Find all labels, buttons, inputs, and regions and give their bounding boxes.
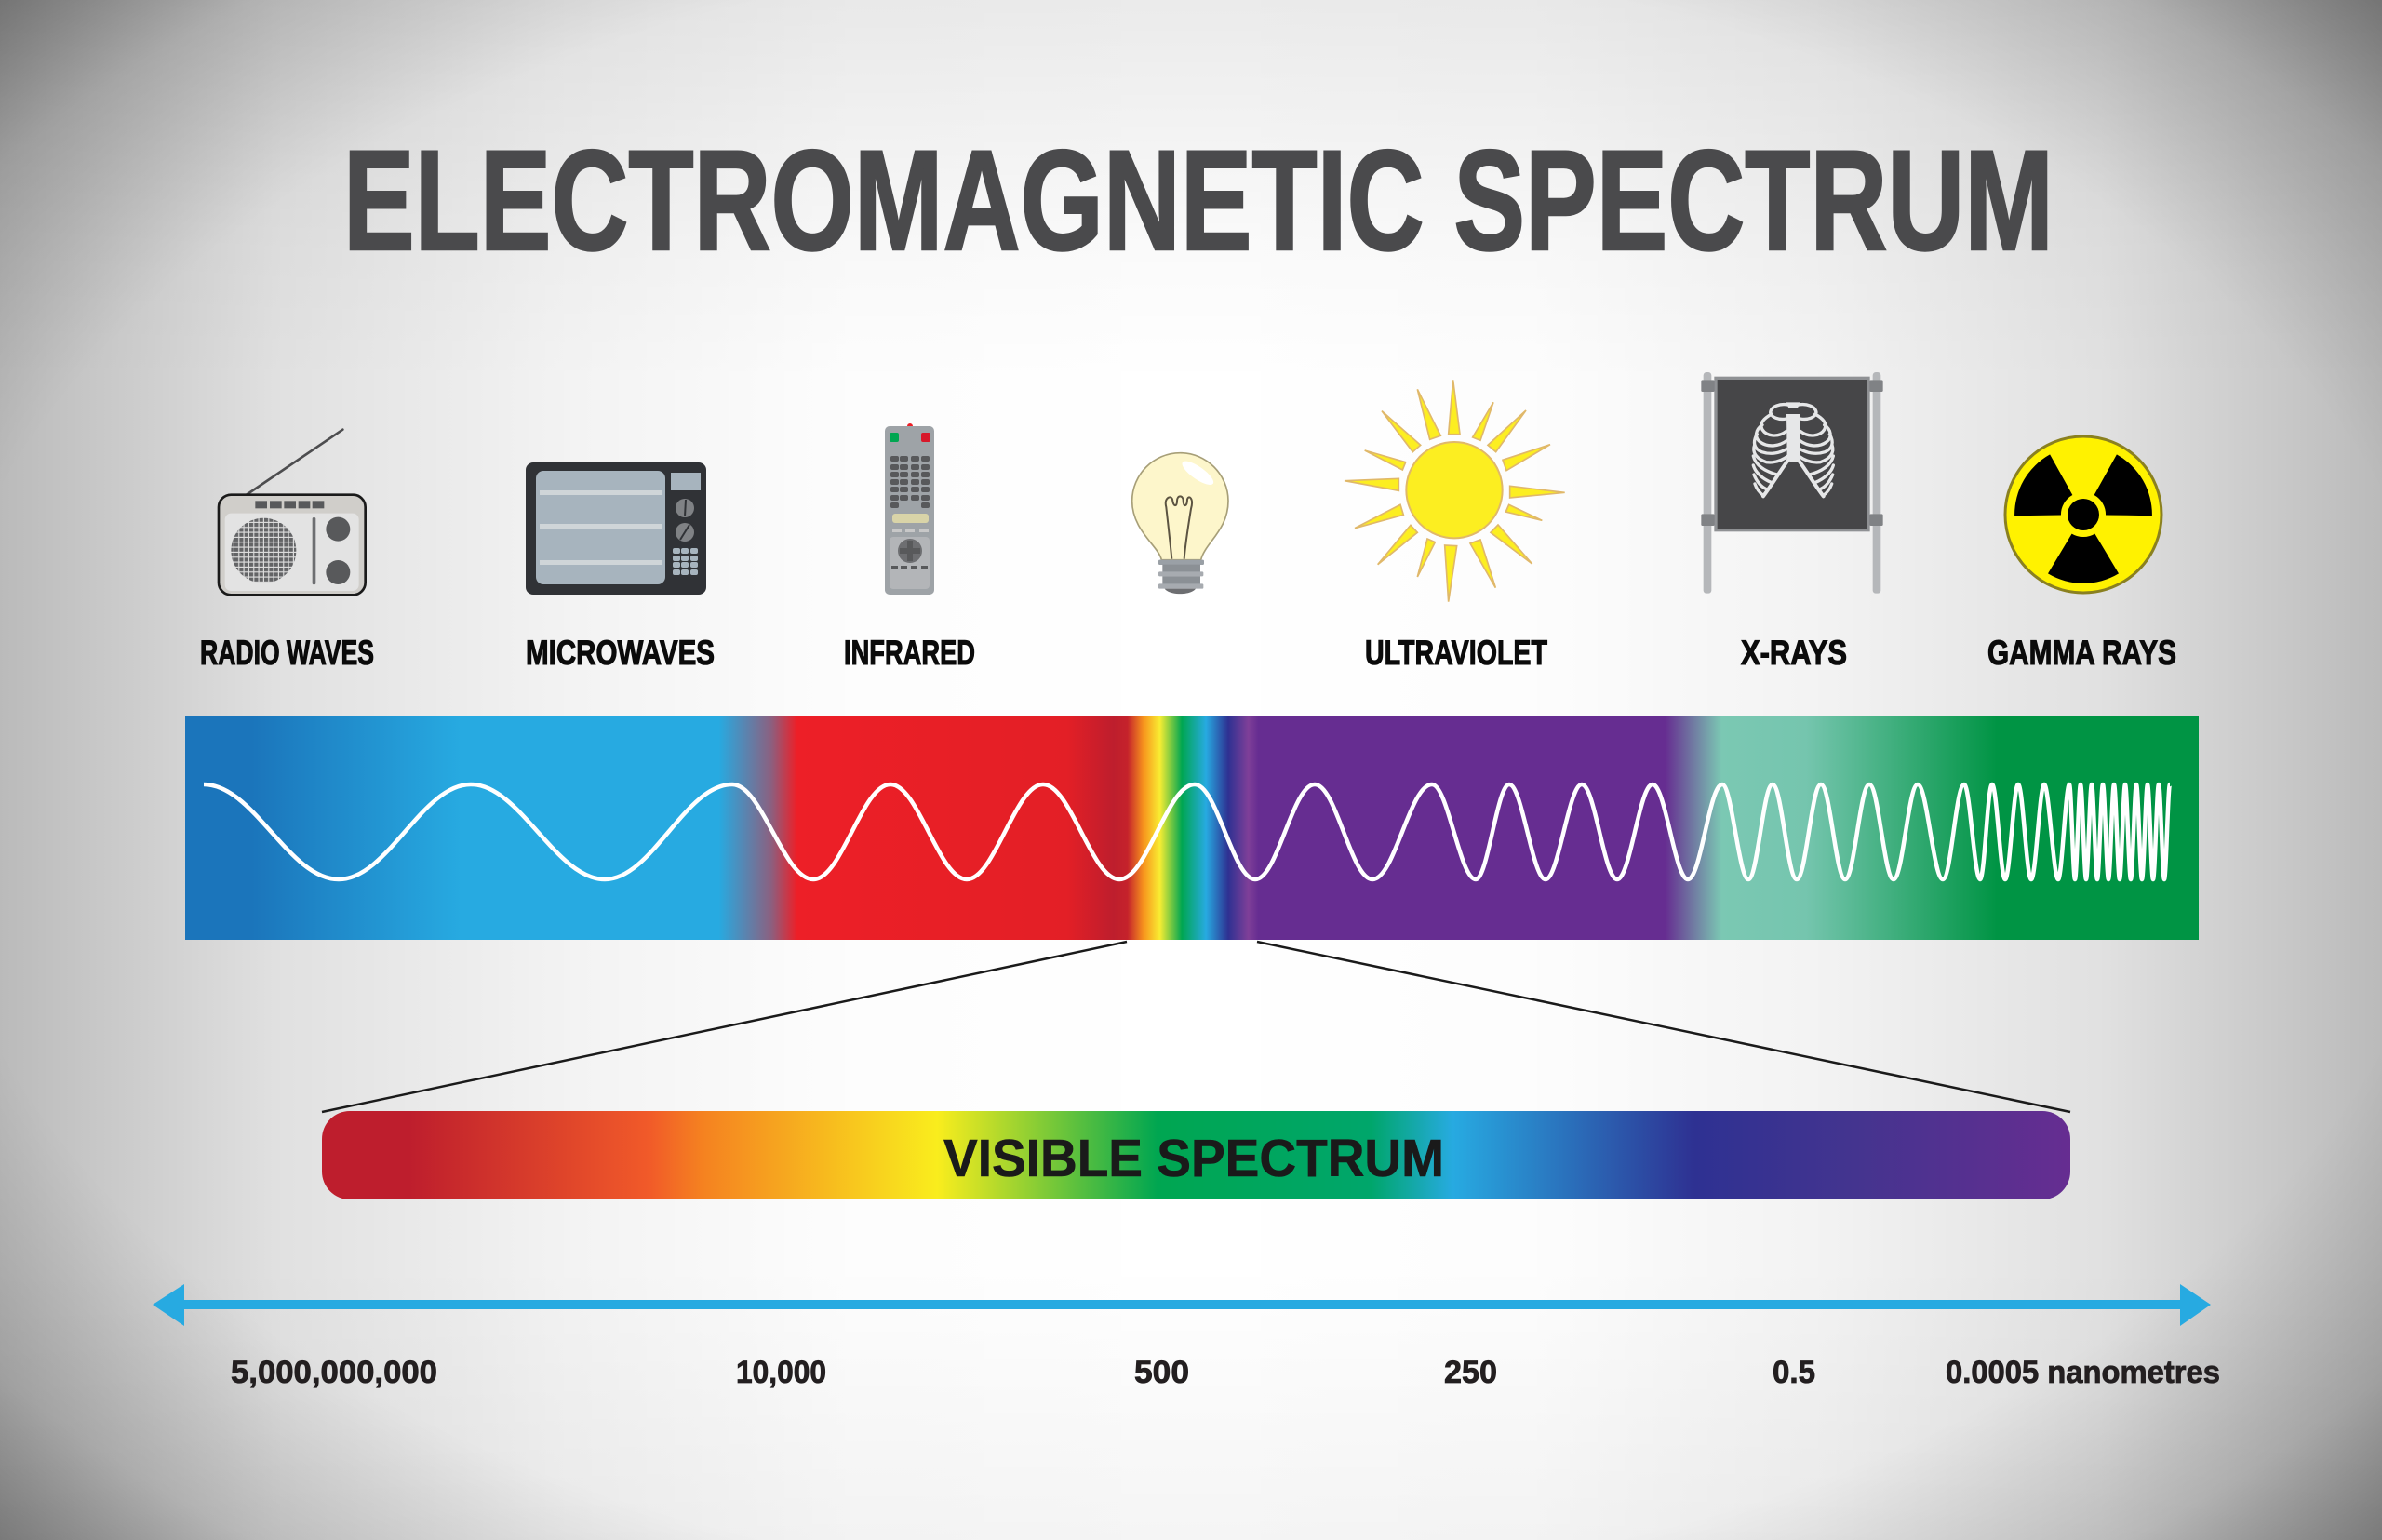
label: microwaves: MICROWAVES — [526, 634, 715, 672]
label: radio waves: RADIO WAVES — [200, 634, 374, 672]
value: 5,000,000,000: 5,000,000,000 — [231, 1355, 437, 1390]
label: x-rays: X-RAYS — [1741, 634, 1847, 672]
icon: radiation symbol — [2005, 436, 2161, 593]
value: 0.5: 0.5 — [1773, 1355, 1815, 1390]
icon: remote control — [885, 423, 934, 595]
rib cage — [1753, 402, 1833, 496]
visible spectrum bar — [322, 1111, 2070, 1199]
value: 250: 250 — [1444, 1355, 1497, 1390]
icon: light bulb — [1132, 453, 1228, 594]
value: 500: 500 — [1134, 1355, 1189, 1390]
wave — [204, 784, 2170, 879]
label: ultraviolet: ULTRAVIOLET — [1365, 634, 1547, 672]
icon: microwave — [526, 462, 706, 595]
icon: sun — [1345, 380, 1565, 602]
spectrum bar — [185, 716, 2199, 940]
visible spectrum label: VISIBLE SPECTRUM — [943, 1129, 1444, 1188]
icon: radio — [219, 430, 366, 595]
value: 0.0005 nanometres: 0.0005 nanometres — [1946, 1355, 2220, 1390]
value: 10,000: 10,000 — [736, 1355, 826, 1390]
wavelength arrow — [153, 1284, 2211, 1326]
icon: x-ray panel — [1701, 372, 1883, 594]
label: infrared: INFRARED — [844, 634, 975, 672]
label: gamma rays: GAMMA RAYS — [1987, 634, 2176, 672]
zoom lines — [322, 942, 2070, 1112]
wavelength scale labels — [231, 1355, 2220, 1390]
